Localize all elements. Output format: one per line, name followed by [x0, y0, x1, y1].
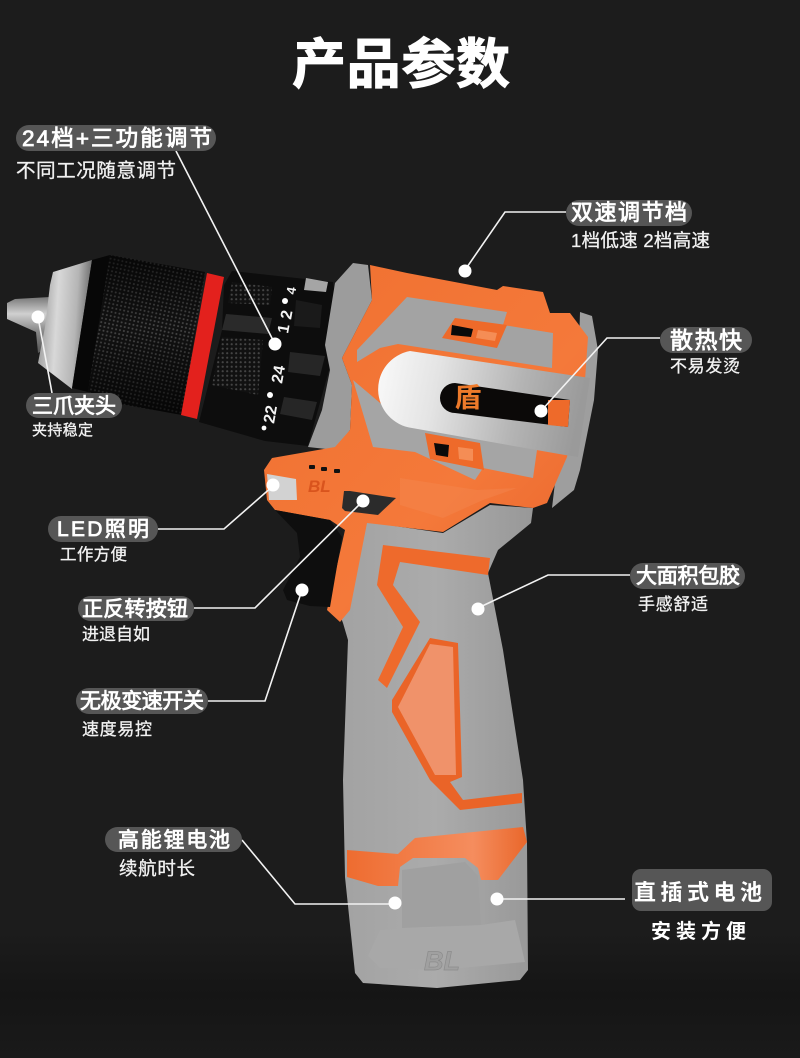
callout: direct insert battery: 直插式电池 [634, 880, 762, 905]
title: 产品参数 [292, 35, 510, 95]
callout: three-jaw chuck: 三爪夹头 [32, 395, 116, 418]
drill illustration [7, 255, 598, 988]
orange motor housing [264, 265, 588, 622]
callout: two speed [458, 200, 710, 278]
label pill [566, 200, 692, 226]
label pill [26, 393, 122, 418]
grey handle and battery [338, 505, 533, 988]
knurled chuck sleeve [88, 255, 205, 415]
orange highlight [400, 478, 517, 518]
label pill [630, 563, 745, 589]
collar numerals: 2 [278, 309, 297, 321]
silver end cap [552, 312, 598, 508]
gear collar [199, 271, 340, 446]
chuck silver cone [38, 260, 92, 389]
direction button [342, 491, 396, 515]
callout: variable speed switch [76, 584, 308, 739]
label pill [78, 596, 194, 621]
callout: overmold grip: 手感舒适 [638, 595, 708, 614]
clip slot [440, 383, 570, 427]
callout: direction button: 进退自如 [82, 625, 150, 644]
BL logo: BL [308, 477, 331, 496]
callout: variable speed switch: 无极变速开关 [80, 690, 204, 713]
callout: lithium battery: 续航时长 [119, 858, 195, 879]
label pill [16, 125, 216, 151]
chuck black ring [72, 255, 110, 392]
callout: heat dissipation: 不易发烫 [670, 357, 740, 376]
label pill [76, 688, 208, 714]
collar numerals: 4 [283, 285, 299, 296]
red ring [181, 273, 224, 419]
callout: lithium battery: 高能锂电池 [118, 829, 230, 852]
battery base: BL [424, 946, 460, 976]
callout: heat dissipation: 散热快 [670, 327, 742, 353]
chuck tip [7, 297, 54, 353]
label pill [632, 869, 772, 911]
LED lamp [267, 474, 297, 500]
callout: two speed: 双速调节档 [571, 200, 687, 225]
collar numerals: 1 [275, 323, 294, 335]
upper grey panel [357, 297, 553, 368]
battery base [368, 862, 525, 976]
callout: direct insert battery: 安装方便 [651, 919, 746, 943]
collar numerals [261, 285, 299, 430]
orange battery band [347, 827, 527, 886]
label pill [48, 516, 158, 542]
silver belt clip [378, 351, 590, 457]
callout: 24 gears: 不同工况随意调节 [16, 160, 176, 182]
lower vent [425, 433, 484, 470]
callout: direction button [78, 494, 370, 644]
callout: lithium battery [105, 827, 402, 910]
callout: two speed: 1档低速 2档高速 [571, 230, 710, 251]
indicator slots [309, 465, 340, 473]
callout: direct insert battery [490, 869, 772, 943]
callout: overmold grip: 大面积包胶 [636, 565, 740, 588]
callout: three-jaw chuck: 夹持稳定 [32, 422, 93, 439]
callout: 24 gears: 24档+三功能调节 [22, 126, 212, 151]
callout: heat dissipation [534, 327, 752, 418]
clip slot: 盾 [454, 383, 482, 413]
callout: 24 gears [16, 125, 282, 350]
callout: LED light [48, 478, 280, 564]
label pill [105, 827, 242, 852]
upper vent [442, 318, 507, 348]
callout: LED light: 工作方便 [60, 545, 127, 564]
collar numerals: 22 [261, 404, 281, 425]
lower grey panel [353, 380, 537, 480]
callout: overmold grip [472, 563, 745, 616]
silver motor front plate [308, 263, 372, 450]
orange handle trim [377, 545, 490, 688]
callout: three-jaw chuck [26, 310, 122, 439]
orange grip pad [392, 638, 522, 810]
label pill [660, 327, 752, 353]
collar numerals: 24 [269, 364, 289, 385]
callout: LED light: LED照明 [57, 518, 149, 541]
trigger [275, 510, 342, 607]
callout: variable speed switch: 速度易控 [82, 720, 152, 739]
callout: direction button: 正反转按钮 [82, 598, 188, 621]
